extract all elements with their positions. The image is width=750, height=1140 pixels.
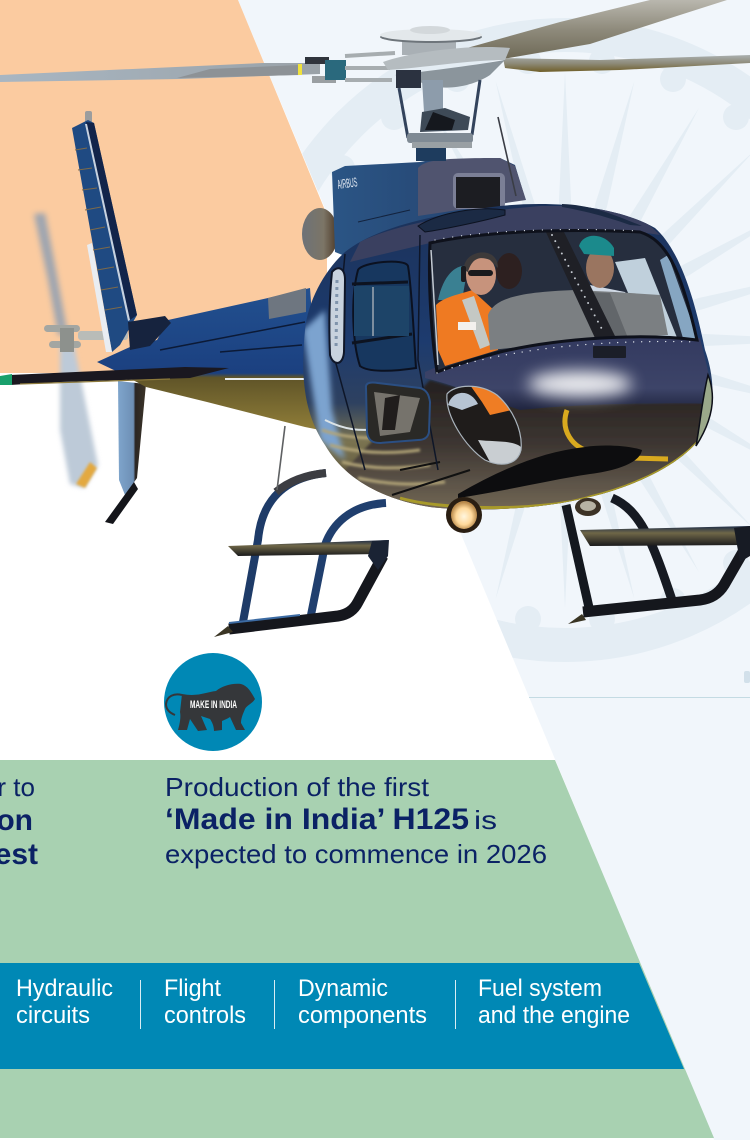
door frame lines <box>335 235 438 470</box>
chin window <box>446 386 522 465</box>
engine exhaust <box>302 208 338 260</box>
under-nose light <box>575 498 601 516</box>
systems list: and the engine <box>478 1002 630 1029</box>
panel: blue systems band <box>0 963 684 1069</box>
windshield <box>425 225 705 375</box>
text block: cropped left statement <box>0 772 38 871</box>
text block: production statement: ‘Made in India’ H125 <box>165 803 469 836</box>
nose side glass <box>696 375 712 446</box>
text block: production statement: expected to commence in 2026 <box>165 839 547 869</box>
systems list <box>16 975 630 1029</box>
side reflection <box>303 310 345 460</box>
main rotor <box>0 0 750 161</box>
panel: peach diagonal backdrop <box>0 0 327 373</box>
systems list: controls <box>164 1002 246 1029</box>
pilot right <box>579 236 626 293</box>
lower door window <box>366 383 430 443</box>
tail rotor <box>34 213 128 488</box>
belly strut <box>277 426 285 490</box>
systems list: components <box>298 1002 427 1029</box>
centre pillar <box>544 228 615 338</box>
pilot left head <box>461 252 498 295</box>
roof panels <box>350 206 660 262</box>
lion silhouette <box>166 684 255 731</box>
text block: production statement <box>165 772 547 869</box>
landing light <box>446 497 482 533</box>
vertical fin <box>72 111 146 524</box>
systems list: Hydraulic <box>16 975 113 1002</box>
helicopter <box>0 0 750 637</box>
rotor blade right lower <box>503 55 750 72</box>
systems list: circuits <box>16 1002 90 1029</box>
lower nose reflection <box>344 379 702 510</box>
rotor blade right upper <box>467 0 727 60</box>
chakra watermark <box>260 35 750 645</box>
systems list: Flight <box>164 975 221 1002</box>
door window <box>352 262 416 371</box>
upper nose surface <box>425 338 716 410</box>
roof window <box>418 209 505 232</box>
right skid <box>566 498 750 624</box>
yellow belly edge <box>400 442 696 510</box>
systems list: Fuel system <box>478 975 602 1002</box>
shadow <box>458 446 642 498</box>
hub <box>305 26 510 161</box>
fuselage <box>303 204 712 510</box>
nose vent <box>593 346 626 358</box>
ground stripes in side reflection <box>322 430 445 484</box>
rear passenger <box>496 253 522 289</box>
tail boom <box>97 288 320 430</box>
antenna <box>498 117 516 196</box>
rear seat <box>438 266 468 300</box>
text block: production statement: is <box>474 805 497 835</box>
panel: green text background <box>0 760 714 1138</box>
divider line and small mark at right <box>529 671 750 698</box>
badge wordmark: MAKE IN INDIA <box>190 699 237 711</box>
side narrow window <box>329 268 345 363</box>
left skid <box>214 473 389 637</box>
pilot left vest <box>436 290 498 366</box>
engine cowling <box>332 158 526 256</box>
panel: pale blue diagonal backdrop <box>238 0 750 1140</box>
rotor blade left <box>0 63 320 82</box>
systems list: Dynamic <box>298 975 388 1002</box>
sky through windshield <box>615 258 676 336</box>
nose highlight <box>528 371 632 397</box>
icon: Make in India lion badge <box>164 653 262 751</box>
yellow taxi line <box>565 410 668 459</box>
horizontal stabilizer <box>0 367 229 385</box>
text block: production statement: Production of the first <box>165 772 430 802</box>
engine cowling: AIRBUS <box>336 174 358 192</box>
instrument coaming <box>488 290 668 350</box>
